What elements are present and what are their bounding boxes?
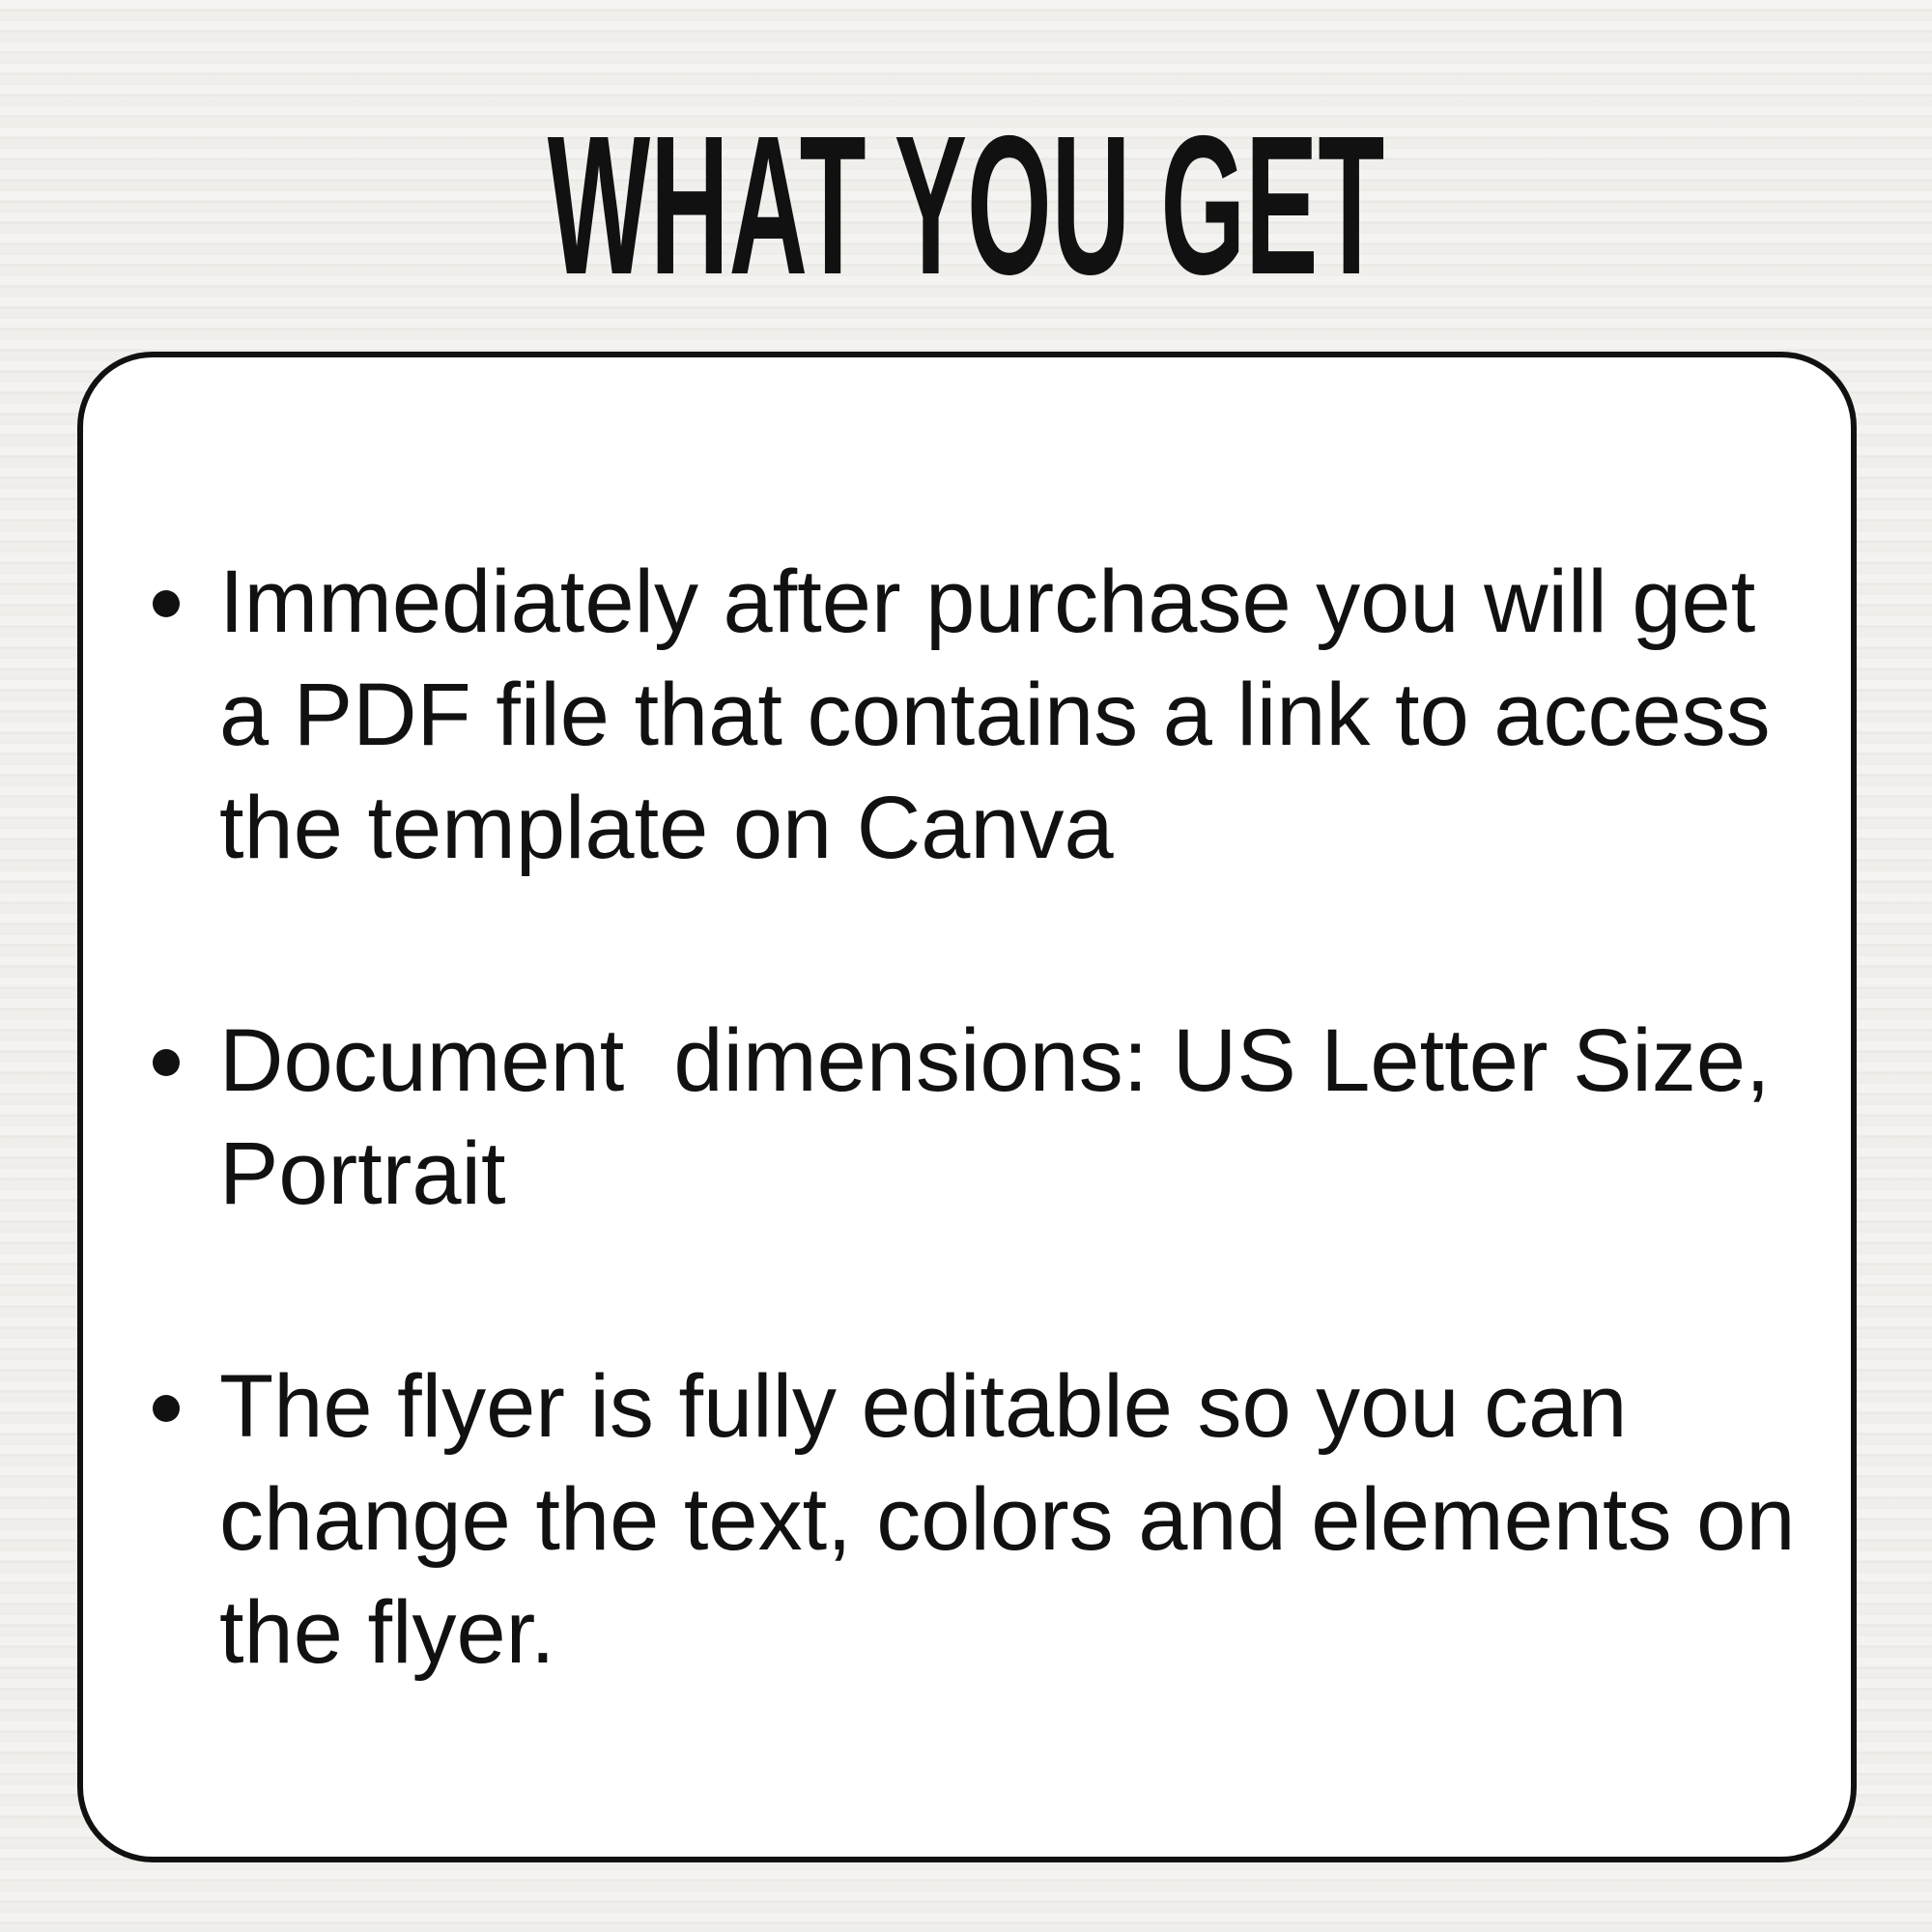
bullet item 2	[153, 1011, 1771, 1223]
panel: content box: the template on Canva	[219, 779, 1114, 877]
bullet item 1	[153, 553, 1771, 877]
panel: content box	[77, 352, 1857, 1862]
bullet item 3	[153, 1357, 1795, 1682]
panel: content box: Document dimensions: US Letter Size,	[219, 1011, 1771, 1110]
panel: content box: change the text, colors and elements on	[219, 1470, 1795, 1569]
panel: content box: Portrait	[219, 1124, 506, 1223]
title: WHAT YOU GET	[548, 95, 1384, 316]
panel: content box: The flyer is fully editable so you can	[219, 1357, 1627, 1456]
panel: content box: the flyer.	[219, 1583, 555, 1682]
panel: content box: Immediately after purchase you will get	[219, 553, 1755, 651]
panel: content box: a PDF file that contains a link to access	[219, 666, 1771, 764]
